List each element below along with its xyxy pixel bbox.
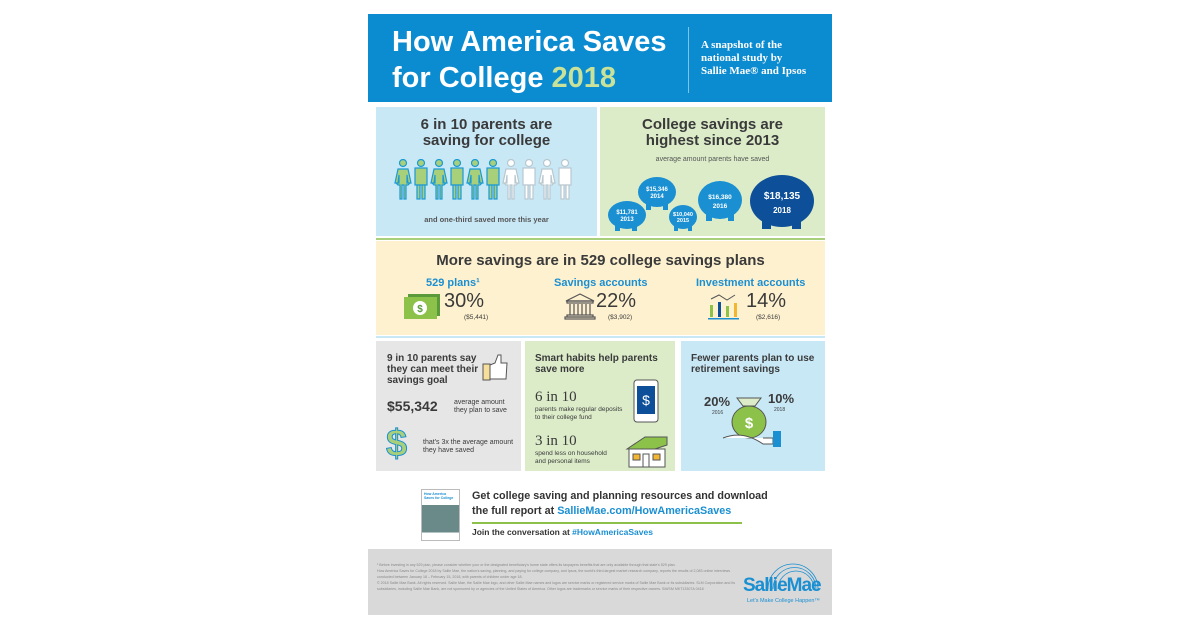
chart: piggy banks: 2013 (620, 217, 634, 223)
heading (642, 116, 783, 149)
subheading: average amount parents have saved (656, 156, 769, 163)
stat: 6 in 10: parents make regular deposits (535, 406, 622, 413)
call to action: the full report at SallieMae.com/HowAmericaSaves (472, 505, 731, 517)
stat: savings accounts (554, 277, 648, 321)
chart: piggy banks: $18,135 (764, 191, 801, 202)
heading (421, 116, 552, 149)
logo: Sallie Mae: Let's Make College Happen™ (747, 598, 820, 604)
stat: 6 in 10: 6 in 10 (535, 389, 577, 405)
stat: investment accounts: 14% (746, 290, 786, 312)
footer (368, 549, 832, 615)
icon: money bag: $ (745, 415, 754, 432)
subtitle: Sallie Mae® and Ipsos (701, 65, 806, 77)
stat: 20%: 20% (704, 394, 730, 409)
panel: smart habits (525, 341, 675, 471)
stat: investment accounts (696, 277, 805, 321)
heading (387, 353, 478, 386)
stat: savings accounts: ($3,902) (608, 314, 632, 321)
chart: piggy banks: $16,380 (708, 194, 732, 201)
stat: 3 in 10 (535, 433, 607, 464)
chart: piggy banks: 2014 (650, 194, 664, 200)
title: How America Saves (392, 26, 667, 58)
report thumbnail: How America Saves for College (424, 492, 453, 500)
stat: 3 in 10: and personal items (535, 458, 590, 464)
panel: savings goal: they plan to save (454, 407, 507, 414)
stat: 3 in 10: 3 in 10 (535, 433, 577, 449)
panel: parents saving (376, 107, 597, 236)
icon: money bag (722, 398, 781, 447)
disclaimer: How America Saves for College 2018 by Sallie Mae, the nation's saving, planning, and paying for college company, and Ipsos, the world's third-largest market research company, reports the results of 2,083 online interviews conducted between January 18 – February 15, 2018, with parents of children under age 18. (377, 569, 730, 579)
icon: phone: $ (642, 392, 650, 408)
stat: 529 plans: $ (417, 304, 423, 315)
panel: savings goal: that's 3x the average amount (423, 439, 513, 446)
disclaimer (377, 563, 735, 591)
heading: saving for college (423, 132, 550, 149)
icon: house (626, 436, 668, 468)
title: for College 2018 (392, 62, 616, 94)
heading: 9 in 10 parents say (387, 353, 476, 364)
panel: retirement (681, 341, 825, 471)
stat: 529 plans: 529 plans¹ (426, 277, 480, 289)
panel: savings goal: average amount (454, 399, 505, 406)
panel: 529 plans (376, 241, 825, 335)
chart: piggy banks: 2016 (713, 203, 728, 210)
stat: 529 plans: ($5,441) (464, 314, 488, 321)
heading (691, 353, 814, 375)
panel: savings highest (600, 107, 825, 236)
logo: Sallie Mae: SallieMae (743, 575, 821, 596)
heading: retirement savings (691, 364, 780, 375)
stat: 10%: 10% (768, 391, 794, 406)
subtitle: A snapshot of the (701, 39, 782, 51)
stat: 55342: $55,342 (387, 398, 438, 414)
chart: piggy banks (608, 175, 814, 231)
stat: 529 plans (404, 277, 488, 321)
disclaimer: ¹ Before investing in any 529 plan, please consider whether your or the designated beneficiary's home state offers its taxpayers benefits that are only available through that state's 529 plan. (377, 563, 676, 567)
title (392, 26, 667, 94)
heading: savings goal (387, 375, 448, 386)
header (368, 14, 832, 102)
heading: they can meet their (387, 364, 478, 375)
heading: highest since 2013 (646, 132, 779, 149)
panel: retirement: 2016 (712, 410, 723, 416)
heading: save more (535, 364, 584, 375)
logo: Sallie Mae (743, 564, 821, 604)
panel: savings goal (376, 341, 521, 471)
heading: Smart habits help parents (535, 353, 658, 364)
icon: people (394, 159, 572, 200)
stat: savings accounts: Savings accounts (554, 277, 648, 289)
panel: retirement: 2018 (774, 407, 785, 413)
chart: piggy banks: $15,346 (646, 187, 668, 193)
heading: More savings are in 529 college savings plans (436, 252, 765, 269)
icon: dollar: $ (386, 423, 407, 465)
heading: Fewer parents plan to use (691, 353, 814, 364)
call to action (472, 490, 768, 537)
report thumbnail (421, 489, 460, 541)
disclaimer: © 2018 Sallie Mae Bank. All rights reserved. Sallie Mae, the Sallie Mae logo, and other Sallie Mae names and logos are service marks or registered service marks of Sallie Mae Bank or its subsidiaries. SLM Corporation and its subsidiaries, including Sallie Mae Bank, are not sponsored by or agencies of the United States of America. Other logos are trademarks or service marks of their respective owners. SM/SM MKT13307A 0418 (377, 581, 735, 591)
stat: 6 in 10: to their college fund (535, 414, 592, 420)
stat: 3 in 10: spend less on household (535, 450, 607, 457)
call to action: Get college saving and planning resources and download (472, 490, 768, 502)
stat: investment accounts: Investment accounts (696, 277, 805, 289)
panel: savings goal: they have saved (423, 447, 474, 454)
icon: thumbs up (482, 354, 508, 380)
heading (535, 353, 658, 375)
stat: investment accounts: ($2,616) (756, 314, 780, 321)
stat: savings accounts: 22% (596, 290, 636, 312)
call to action: Join the conversation at #HowAmericaSaves (472, 527, 653, 537)
caption: and one-third saved more this year (424, 215, 549, 224)
heading: 6 in 10 parents are (421, 116, 552, 133)
chart: piggy banks: $10,040 (673, 212, 693, 218)
stat: 6 in 10 (535, 389, 622, 420)
chart: piggy banks: $11,781 (616, 210, 638, 216)
stat: 529 plans: 30% (444, 290, 484, 312)
chart: piggy banks: 2018 (773, 206, 791, 215)
subtitle: national study by (701, 52, 782, 64)
icon: phone (634, 380, 658, 422)
subtitle (701, 39, 806, 77)
chart: piggy banks: 2015 (677, 218, 689, 224)
heading: College savings are (642, 116, 783, 133)
